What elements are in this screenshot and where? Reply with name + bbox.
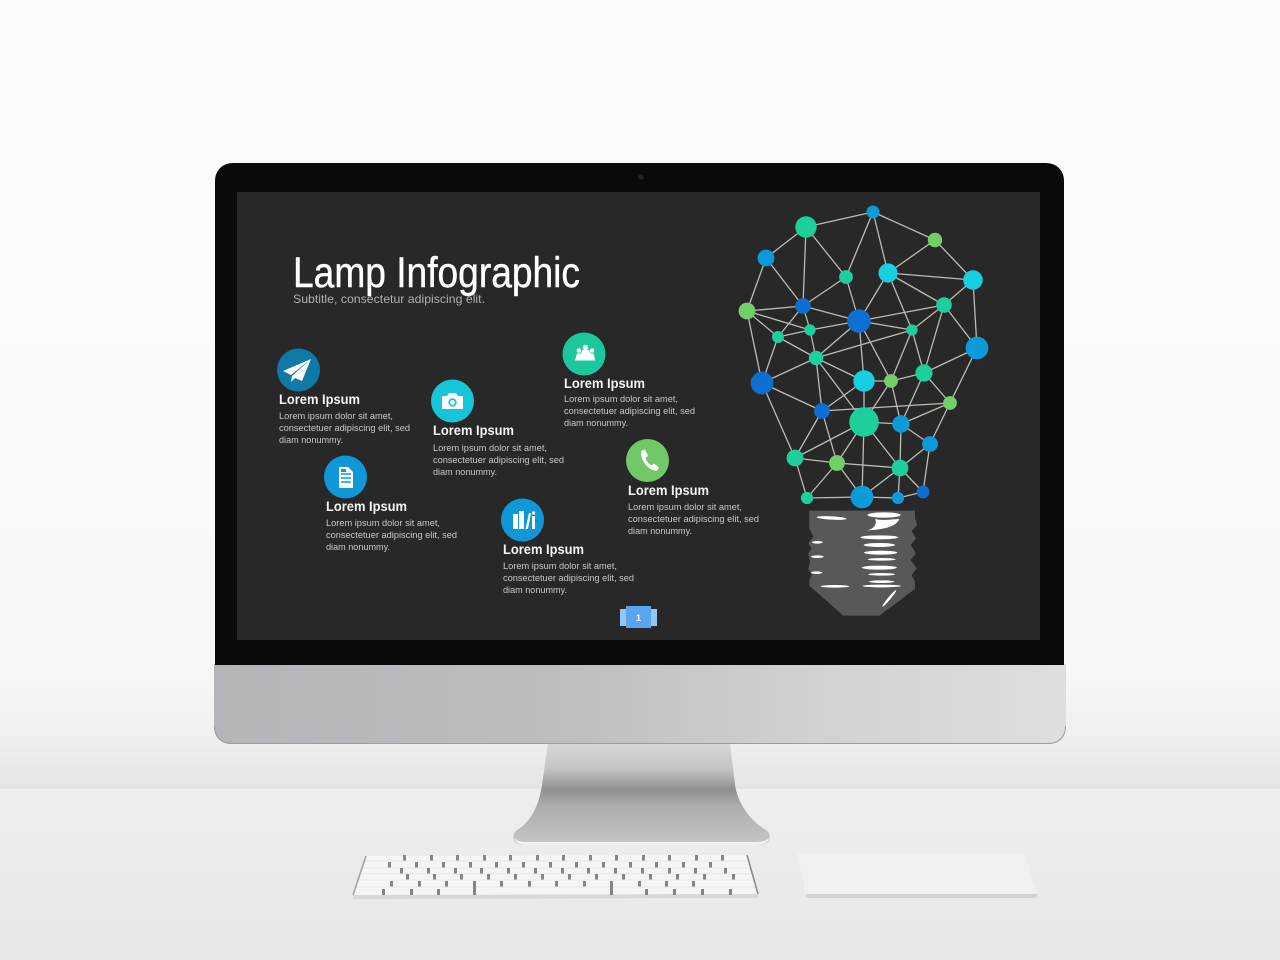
body text <box>326 518 457 553</box>
monitor bezel <box>215 163 1064 665</box>
icon: document <box>324 456 367 498</box>
body text: diam nonummy. <box>503 585 567 596</box>
body text: consectetuer adipiscing elit, sed <box>564 406 695 417</box>
keyboard <box>353 855 758 899</box>
body text: Lorem ipsum dolor sit amet, <box>279 411 393 422</box>
body text: consectetuer adipiscing elit, sed <box>503 573 634 584</box>
heading: Lorem Ipsum <box>628 483 709 498</box>
item: paper plane <box>277 348 410 446</box>
page number badge: 1 <box>636 613 641 623</box>
icon: books <box>501 498 544 542</box>
page number badge <box>620 606 657 628</box>
bulb connecting lines <box>747 212 977 498</box>
icon: phone <box>626 439 669 482</box>
slide subtitle: Subtitle, consectetur adipiscing elit. <box>293 292 485 306</box>
monitor stand <box>513 743 770 845</box>
body text: diam nonummy. <box>279 435 343 446</box>
slide title: Lamp Infographic <box>293 249 580 297</box>
body text: Lorem ipsum dolor sit amet, <box>628 502 742 513</box>
item: phone <box>626 439 759 537</box>
body text <box>503 561 634 596</box>
body text: consectetuer adipiscing elit, sed <box>628 514 759 525</box>
item: document <box>324 456 457 553</box>
heading: Lorem Ipsum <box>326 499 407 514</box>
item: people <box>562 332 695 429</box>
body text <box>279 411 410 446</box>
body text <box>628 502 759 537</box>
body text: diam nonummy. <box>433 467 497 478</box>
body text <box>564 394 695 429</box>
slide screen <box>237 192 1040 640</box>
body text: Lorem ipsum dolor sit amet, <box>503 561 617 572</box>
body text: consectetuer adipiscing elit, sed <box>279 423 410 434</box>
heading: Lorem Ipsum <box>564 376 645 391</box>
body text: diam nonummy. <box>326 542 390 553</box>
heading: Lorem Ipsum <box>433 423 514 438</box>
bulb nodes <box>739 206 988 508</box>
body text: diam nonummy. <box>564 418 628 429</box>
icon: camera <box>431 380 474 422</box>
item: camera <box>431 380 564 478</box>
keyboard keys <box>382 855 735 895</box>
heading: Lorem Ipsum <box>503 542 584 557</box>
icon: people <box>562 332 606 376</box>
lamp screw base <box>808 511 917 616</box>
icon: paper plane <box>277 348 320 392</box>
heading: Lorem Ipsum <box>279 392 360 407</box>
body text: diam nonummy. <box>628 526 692 537</box>
trackpad <box>797 853 1037 898</box>
body text: Lorem ipsum dolor sit amet, <box>564 394 678 405</box>
monitor <box>214 163 1066 744</box>
body text: consectetuer adipiscing elit, sed <box>326 530 457 541</box>
item: books <box>501 498 634 596</box>
camera <box>638 174 644 180</box>
body text: consectetuer adipiscing elit, sed <box>433 455 564 466</box>
body text: Lorem ipsum dolor sit amet, <box>433 443 547 454</box>
body text <box>433 443 564 478</box>
lamp network bulb <box>739 206 988 508</box>
monitor chin <box>214 664 1066 744</box>
keyboard body <box>353 855 758 898</box>
body text: Lorem ipsum dolor sit amet, <box>326 518 440 529</box>
